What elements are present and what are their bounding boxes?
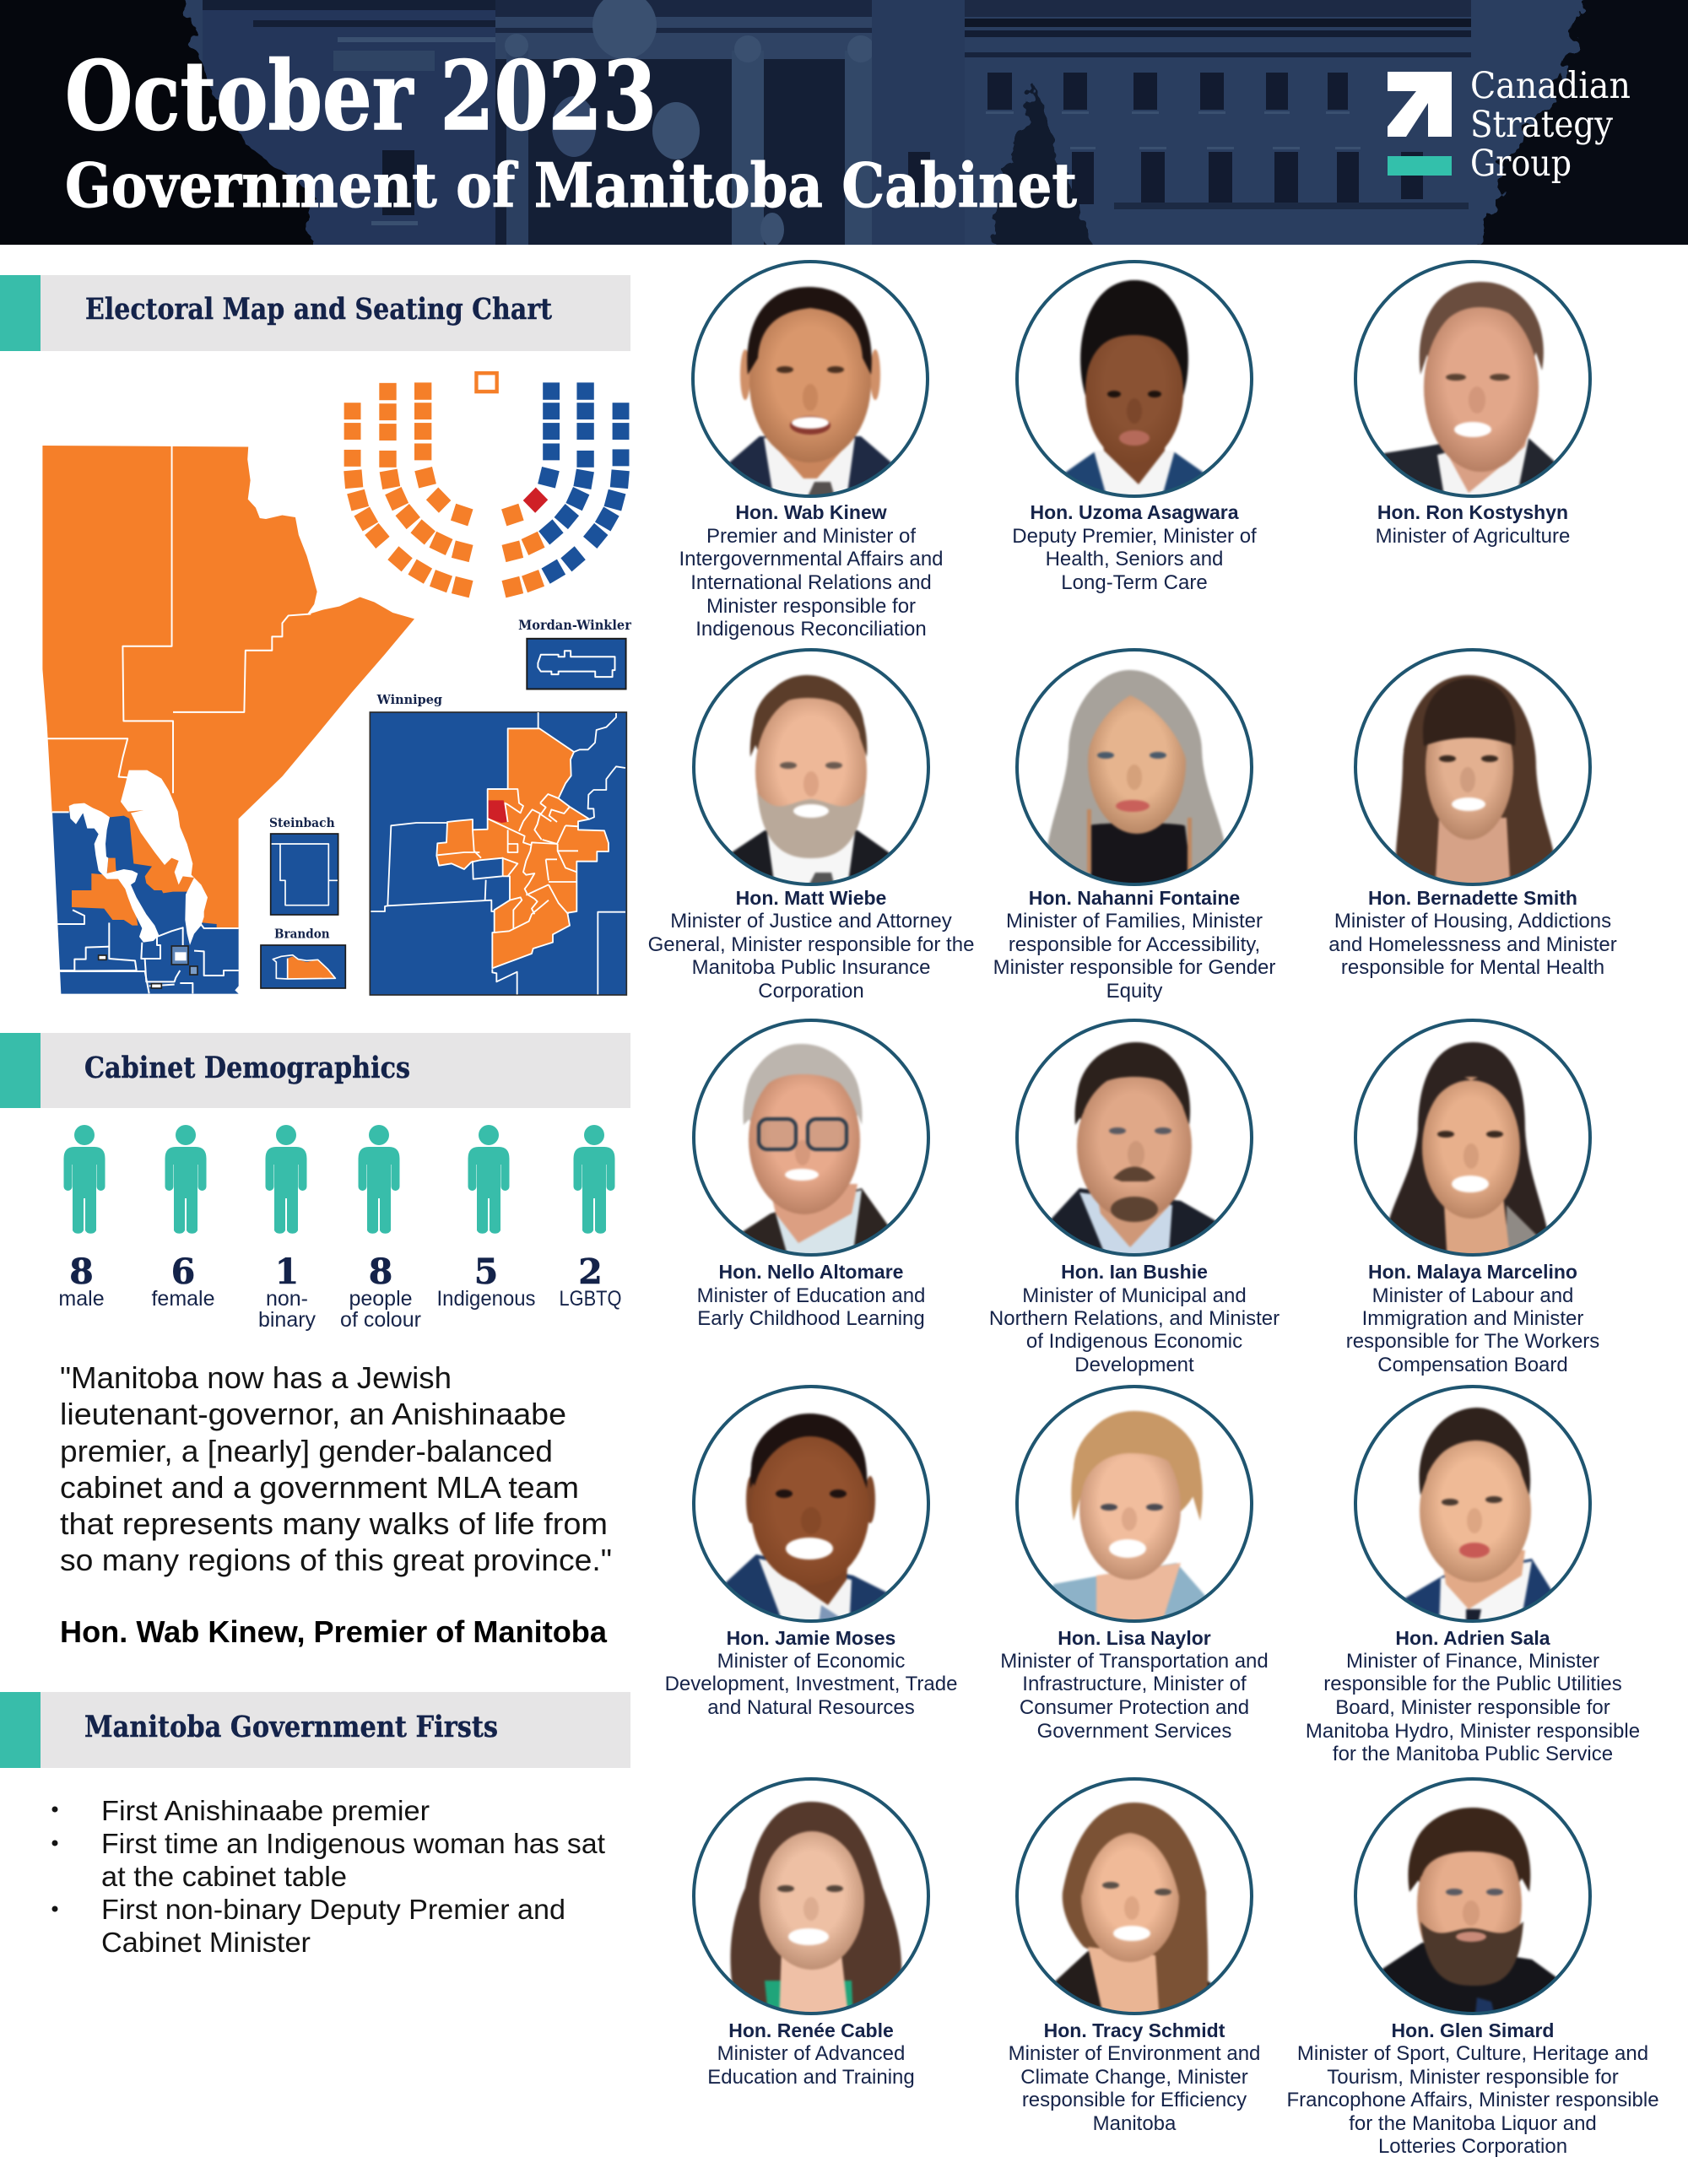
- list: government firsts: Cabinet Minister: [101, 1927, 311, 1958]
- text: Tracy Schmidt: responsible for Efficiency: [1022, 2089, 1247, 2111]
- demographics: 8 male: male: [58, 1287, 105, 1311]
- portrait: Jamie Moses: [693, 1387, 929, 1630]
- text: Tracy Schmidt: Climate Change, Minister: [1020, 2066, 1248, 2089]
- text: Nello Altomare: [697, 1261, 925, 1330]
- demographics: 8 male: 8: [69, 1251, 94, 1292]
- map inset: Steinbach: Steinbach: [269, 815, 335, 830]
- text: Adrien Sala: responsible for the Public Utilities: [1323, 1673, 1622, 1695]
- text: Wab Kinew: Premier and Minister of: [706, 525, 916, 548]
- header banner: [0, 0, 1688, 245]
- text: Bernadette Smith: Hon. Bernadette Smith: [1368, 887, 1577, 909]
- text: Adrien Sala: Board, Minister responsible for: [1335, 1696, 1610, 1719]
- demographics: 6 female: female: [151, 1287, 215, 1311]
- text: Nahanni Fontaine: Hon. Nahanni Fontaine: [1029, 887, 1240, 909]
- text: Tracy Schmidt: Minister of Environment and: [1009, 2042, 1260, 2065]
- quote from the premier: lieutenant-governor, an Anishinaabe: [60, 1397, 566, 1431]
- text: Ian Bushie: Minister of Municipal and: [1022, 1284, 1247, 1307]
- logo: Canadian Strategy Group: Canadian: [1470, 65, 1631, 107]
- portrait: Uzoma Asagwara: [1016, 262, 1252, 505]
- text: Lisa Naylor: Consumer Protection and: [1020, 1696, 1249, 1719]
- text: Tracy Schmidt: Hon. Tracy Schmidt: [1044, 2019, 1225, 2041]
- portrait: Matt Wiebe: [693, 650, 929, 894]
- text: Malaya Marcelino: Compensation Board: [1377, 1354, 1568, 1376]
- text: Glen Simard: Francophone Affairs, Minister responsible: [1286, 2089, 1659, 2111]
- map inset: Brandon: [261, 927, 345, 988]
- map inset: Steinbach: [269, 815, 338, 915]
- text: Nahanni Fontaine: Minister responsible for Gender: [993, 956, 1275, 979]
- text: Wab Kinew: Minister responsible for: [706, 595, 916, 618]
- text: Malaya Marcelino: responsible for The Workers: [1346, 1330, 1599, 1353]
- quote from the premier: premier, a [nearly] gender-balanced: [60, 1434, 553, 1468]
- text: Glen Simard: Hon. Glen Simard: [1392, 2019, 1554, 2041]
- list: government firsts: First Anishinaabe premier: [101, 1795, 430, 1826]
- portrait: Ian Bushie: [1016, 1020, 1252, 1264]
- text: Ron Kostyshyn: Hon. Ron Kostyshyn: [1377, 501, 1568, 523]
- text: Ron Kostyshyn: [1376, 501, 1570, 548]
- logo: Canadian Strategy Group: [1388, 65, 1631, 185]
- text: Malaya Marcelino: Immigration and Minister: [1362, 1307, 1583, 1330]
- text: Glen Simard: for the Manitoba Liquor and: [1349, 2112, 1597, 2135]
- text: Wab Kinew: Indigenous Reconciliation: [695, 618, 927, 641]
- text: Matt Wiebe: Manitoba Public Insurance: [692, 956, 930, 979]
- text: Matt Wiebe: Corporation: [758, 980, 864, 1003]
- text: Nahanni Fontaine: Equity: [1106, 980, 1162, 1003]
- text: Nahanni Fontaine: [993, 887, 1275, 1003]
- text: Renée Cable: [707, 2019, 915, 2089]
- demographics: 8 male: [58, 1125, 105, 1311]
- title: Government of Manitoba Cabinet: [65, 149, 1077, 221]
- text: Uzoma Asagwara: Deputy Premier, Minister of: [1012, 525, 1257, 548]
- quote from the premier: that represents many walks of life from: [60, 1506, 608, 1541]
- text: Jamie Moses: Development, Investment, Trade: [665, 1673, 957, 1695]
- text: Tracy Schmidt: [1009, 2019, 1260, 2135]
- portrait: Tracy Schmidt: [1016, 1779, 1252, 2023]
- section heading: Manitoba Government Firsts: [0, 1692, 630, 1768]
- quote from the premier: so many regions of this great province.": [60, 1543, 612, 1577]
- list: government firsts: First non-binary Deputy Premier and: [101, 1894, 565, 1925]
- section heading: Electoral Map and Seating Chart: Electoral Map and Seating Chart: [85, 292, 552, 327]
- text: Matt Wiebe: Hon. Matt Wiebe: [736, 887, 886, 909]
- text: Lisa Naylor: Hon. Lisa Naylor: [1058, 1627, 1211, 1649]
- text: Adrien Sala: Manitoba Hydro, Minister responsible: [1306, 1720, 1640, 1743]
- text: Ian Bushie: of Indigenous Economic: [1026, 1330, 1242, 1353]
- quote from the premier: [60, 1360, 612, 1649]
- portrait: Renée Cable: [694, 1779, 928, 2023]
- text: Bernadette Smith: and Homelessness and Minister: [1328, 933, 1617, 956]
- text: Renée Cable: Minister of Advanced: [717, 2042, 905, 2065]
- text: Glen Simard: Lotteries Corporation: [1378, 2135, 1567, 2158]
- text: Adrien Sala: [1306, 1627, 1640, 1765]
- text: Nahanni Fontaine: Minister of Families, Minister: [1006, 910, 1263, 933]
- text: Adrien Sala: Hon. Adrien Sala: [1395, 1627, 1550, 1649]
- section heading: Electoral Map and Seating Chart: [0, 275, 630, 351]
- text: Malaya Marcelino: [1346, 1261, 1599, 1376]
- quote from the premier: Hon. Wab Kinew, Premier of Manitoba: [60, 1614, 608, 1649]
- logo: Canadian Strategy Group: Strategy: [1470, 104, 1614, 146]
- text: Ian Bushie: [989, 1261, 1280, 1376]
- text: Wab Kinew: [679, 501, 944, 641]
- section heading: Cabinet Demographics: [0, 1033, 630, 1108]
- text: Lisa Naylor: Infrastructure, Minister of: [1022, 1673, 1247, 1695]
- map inset: Mordan-Winkler: [518, 618, 632, 689]
- text: Glen Simard: [1286, 2019, 1659, 2158]
- portrait: Bernadette Smith: [1355, 650, 1590, 894]
- demographics: 6 female: 6: [171, 1251, 195, 1292]
- portrait: Wab Kinew: [692, 262, 928, 505]
- text: Wab Kinew: Hon. Wab Kinew: [735, 501, 887, 523]
- text: Adrien Sala: Minister of Finance, Minister: [1346, 1650, 1599, 1673]
- list: government firsts: at the cabinet table: [101, 1861, 347, 1892]
- text: Lisa Naylor: Government Services: [1037, 1720, 1231, 1743]
- text: Bernadette Smith: Minister of Housing, Addictions: [1334, 910, 1611, 933]
- map inset: Brandon: Brandon: [274, 927, 330, 942]
- text: Jamie Moses: Hon. Jamie Moses: [727, 1627, 895, 1649]
- section heading: Cabinet Demographics: Cabinet Demographics: [84, 1051, 410, 1085]
- text: Jamie Moses: Minister of Economic: [717, 1650, 905, 1673]
- demographics: 2 LGBTQ: 2: [578, 1251, 603, 1292]
- list: government firsts: First time an Indigenous woman has sat: [101, 1828, 605, 1859]
- title: [65, 41, 1077, 221]
- map inset: Winnipeg: [370, 692, 626, 995]
- portrait: Nahanni Fontaine: [1017, 650, 1252, 894]
- map inset: Winnipeg: Winnipeg: [376, 692, 442, 707]
- text: Nello Altomare: Minister of Education and: [697, 1284, 925, 1307]
- demographics: 2 LGBTQ: [559, 1125, 621, 1311]
- text: Uzoma Asagwara: [1012, 501, 1257, 594]
- text: Matt Wiebe: [648, 887, 974, 1003]
- demographics: 1 non-binary: [258, 1125, 316, 1332]
- portrait: Adrien Sala: [1355, 1387, 1591, 1630]
- portrait: Ron Kostyshyn: [1355, 262, 1591, 505]
- demographics: 5 Indigenous: Indigenous: [437, 1287, 535, 1311]
- demographics: 1 non-binary: non-: [266, 1287, 308, 1311]
- text: Jamie Moses: and Natural Resources: [707, 1696, 915, 1719]
- list: government firsts: [52, 1795, 605, 1958]
- text: Glen Simard: Tourism, Minister responsible for: [1327, 2066, 1619, 2089]
- portrait: Malaya Marcelino: [1355, 1020, 1590, 1264]
- demographics: 2 LGBTQ: LGBTQ: [559, 1287, 621, 1311]
- map inset: Mordan-Winkler: Mordan-Winkler: [518, 618, 632, 633]
- text: Jamie Moses: [665, 1627, 957, 1719]
- demographics: 6 female: [151, 1125, 215, 1311]
- demographics: 8 people of colour: [340, 1125, 421, 1332]
- text: Renée Cable: Education and Training: [707, 2066, 915, 2089]
- demographics: 8 people of colour: 8: [369, 1251, 392, 1292]
- text: Ian Bushie: Hon. Ian Bushie: [1061, 1261, 1208, 1283]
- electoral map of Manitoba: [42, 446, 414, 994]
- seating chart: [344, 373, 630, 597]
- text: Matt Wiebe: General, Minister responsible for the: [648, 933, 974, 956]
- logo: Canadian Strategy Group: Group: [1470, 143, 1572, 185]
- demographics: 5 Indigenous: [437, 1125, 535, 1311]
- text: Wab Kinew: Intergovernmental Affairs and: [679, 548, 944, 570]
- demographics: 8 people of colour: people: [349, 1287, 413, 1311]
- demographics: 1 non-binary: binary: [258, 1308, 316, 1332]
- text: Uzoma Asagwara: Hon. Uzoma Asagwara: [1030, 501, 1239, 523]
- portrait: Lisa Naylor: [1016, 1387, 1252, 1630]
- demographics: 8 people of colour: of colour: [340, 1308, 421, 1332]
- text: Renée Cable: Hon. Renée Cable: [728, 2019, 894, 2041]
- portrait: Nello Altomare: [693, 1020, 929, 1264]
- text: Nahanni Fontaine: responsible for Accessibility,: [1009, 933, 1260, 956]
- demographics: 1 non-binary: 1: [275, 1251, 299, 1292]
- title: October 2023: [65, 41, 657, 152]
- text: Glen Simard: Minister of Sport, Culture, Heritage and: [1297, 2042, 1648, 2065]
- demographics: 5 Indigenous: 5: [474, 1251, 498, 1292]
- text: Ian Bushie: Northern Relations, and Minister: [989, 1307, 1280, 1330]
- text: Ian Bushie: Development: [1074, 1354, 1194, 1376]
- text: Nello Altomare: Early Childhood Learning: [697, 1307, 925, 1330]
- quote from the premier: "Manitoba now has a Jewish: [60, 1360, 452, 1395]
- text: Adrien Sala: for the Manitoba Public Service: [1333, 1743, 1613, 1765]
- text: Malaya Marcelino: Minister of Labour and: [1372, 1284, 1573, 1307]
- text: Malaya Marcelino: Hon. Malaya Marcelino: [1368, 1261, 1577, 1283]
- text: Nello Altomare: Hon. Nello Altomare: [719, 1261, 903, 1283]
- text: Tracy Schmidt: Manitoba: [1093, 2112, 1177, 2135]
- section heading: Manitoba Government Firsts: Manitoba Government Firsts: [84, 1710, 498, 1744]
- text: Uzoma Asagwara: Health, Seniors and: [1046, 548, 1223, 570]
- text: Uzoma Asagwara: Long-Term Care: [1061, 571, 1208, 594]
- quote from the premier: cabinet and a government MLA team: [60, 1470, 579, 1505]
- text: Lisa Naylor: [1000, 1627, 1269, 1743]
- text: Wab Kinew: International Relations and: [690, 571, 932, 594]
- text: Lisa Naylor: Minister of Transportation and: [1000, 1650, 1269, 1673]
- portrait: Glen Simard: [1355, 1779, 1591, 2023]
- text: Matt Wiebe: Minister of Justice and Attorney: [670, 910, 952, 933]
- text: Bernadette Smith: [1328, 887, 1617, 979]
- text: Ron Kostyshyn: Minister of Agriculture: [1376, 525, 1570, 548]
- text: Bernadette Smith: responsible for Mental Health: [1341, 956, 1604, 979]
